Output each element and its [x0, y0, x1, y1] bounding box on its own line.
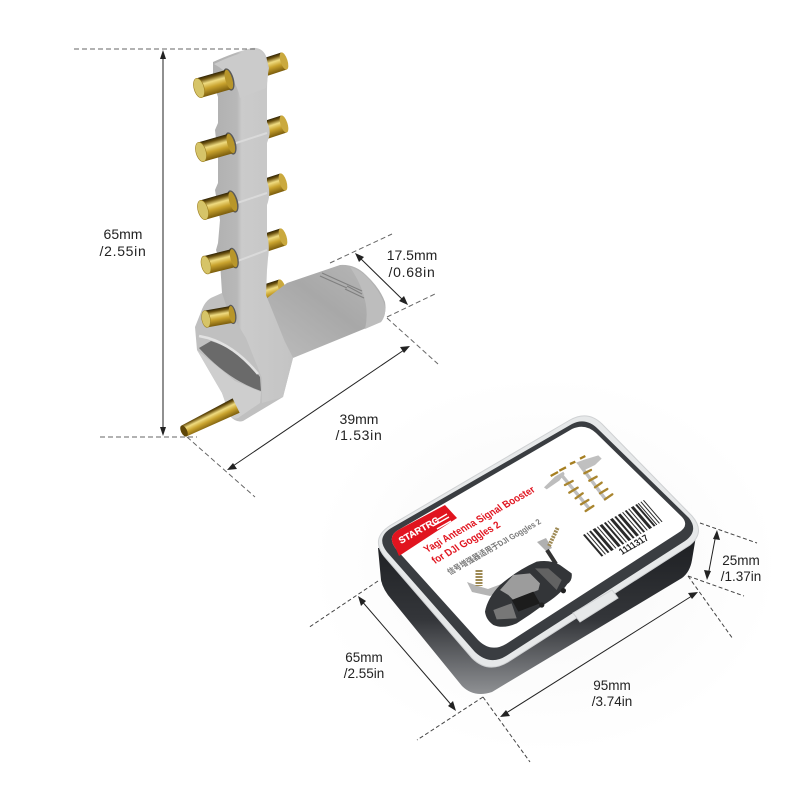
label: antenna height: /2.55in	[100, 243, 146, 259]
packaging box	[378, 416, 699, 694]
spine cross bands	[233, 133, 267, 262]
goggles left antenna elements	[476, 570, 482, 586]
length arrow	[227, 346, 410, 470]
goggles illustration	[467, 527, 572, 627]
box floor shadow	[310, 375, 780, 755]
title line one: Yagi Antenna Signal Booster	[422, 485, 538, 556]
label: antenna length: /1.53in	[336, 427, 382, 443]
antenna clip bracket	[195, 293, 293, 421]
goggles shell	[485, 561, 572, 627]
long bottom gold pin	[178, 398, 240, 440]
goggles highlight	[500, 573, 540, 600]
goggles right antenna	[537, 527, 558, 564]
clip white inner rim	[199, 336, 258, 374]
label: box depth: 65mm	[345, 650, 383, 665]
small antennas illustration	[544, 455, 612, 511]
chinese subtitle: 信号增强器适用于DJI Goggles 2	[445, 516, 543, 577]
antenna product	[178, 48, 386, 440]
body end highlight	[350, 267, 385, 329]
clip dark opening	[199, 341, 261, 391]
title line two: for DJI Goggles 2	[430, 520, 504, 567]
antenna dimension lines	[74, 49, 438, 497]
clip lower wedge	[197, 350, 261, 418]
antenna spine	[213, 48, 293, 403]
brand name: STARTRC	[396, 514, 441, 546]
spine top wrap highlight	[214, 50, 268, 98]
box height arrow	[704, 530, 720, 580]
lid latch	[573, 590, 618, 622]
antenna receiver body	[262, 265, 386, 358]
goggles vent	[512, 592, 540, 612]
width arrow	[355, 253, 408, 305]
white label	[392, 427, 685, 648]
barcode number: 1111317	[617, 533, 651, 557]
brand stripes	[433, 514, 451, 529]
small antenna B	[570, 455, 612, 500]
label: box height: /1.37in	[721, 569, 761, 584]
box width arrow	[500, 592, 698, 717]
goggles left antenna	[467, 582, 506, 596]
goggles knobs	[542, 591, 563, 605]
height arrow	[160, 50, 166, 436]
dashed guide lines	[74, 49, 438, 497]
box depth arrow	[358, 596, 456, 711]
brand mark on body	[320, 273, 364, 298]
front gold pins	[191, 67, 241, 329]
label: box height: 25mm	[722, 553, 760, 568]
transparent lid rim	[378, 416, 699, 667]
goggles top plate	[535, 568, 562, 590]
label: antenna length: 39mm	[340, 411, 378, 427]
box dimension lines	[308, 523, 757, 762]
label: antenna height: 65mm	[104, 226, 142, 242]
label: box width: 95mm	[593, 678, 631, 693]
label: box depth: /2.55in	[344, 666, 384, 681]
small antenna A	[544, 467, 593, 511]
rear gold pins	[260, 51, 290, 303]
dark inner frame	[382, 421, 693, 660]
label: antenna width: 17.5mm	[387, 247, 437, 263]
barcode	[583, 500, 662, 557]
box dark side walls	[378, 530, 697, 694]
label: box width: /3.74in	[592, 694, 632, 709]
red brand corner	[392, 505, 457, 556]
dashed box guides	[308, 523, 757, 762]
label: antenna width: /0.68in	[389, 264, 435, 280]
goggles lower panel	[493, 603, 517, 619]
